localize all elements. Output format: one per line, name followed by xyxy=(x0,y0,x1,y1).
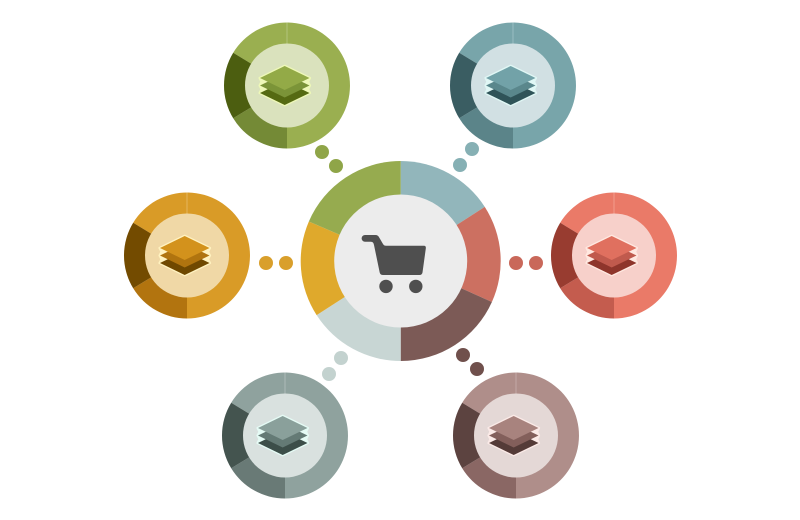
satellite: red xyxy=(551,192,677,318)
satellite: teal xyxy=(450,22,576,148)
satellite: green xyxy=(224,22,350,148)
satellite: grey xyxy=(222,372,348,498)
connector dots: red xyxy=(509,256,543,270)
central donut xyxy=(301,161,501,361)
connector dots: green xyxy=(315,145,343,173)
connector dots: teal xyxy=(453,142,479,172)
connector dots: brown xyxy=(456,348,484,376)
satellite: orange xyxy=(124,192,250,318)
connector dots: light grey xyxy=(322,351,348,381)
icon: shopping cart xyxy=(362,235,426,293)
satellite: brown xyxy=(453,372,579,498)
connector dots: orange xyxy=(259,256,293,270)
